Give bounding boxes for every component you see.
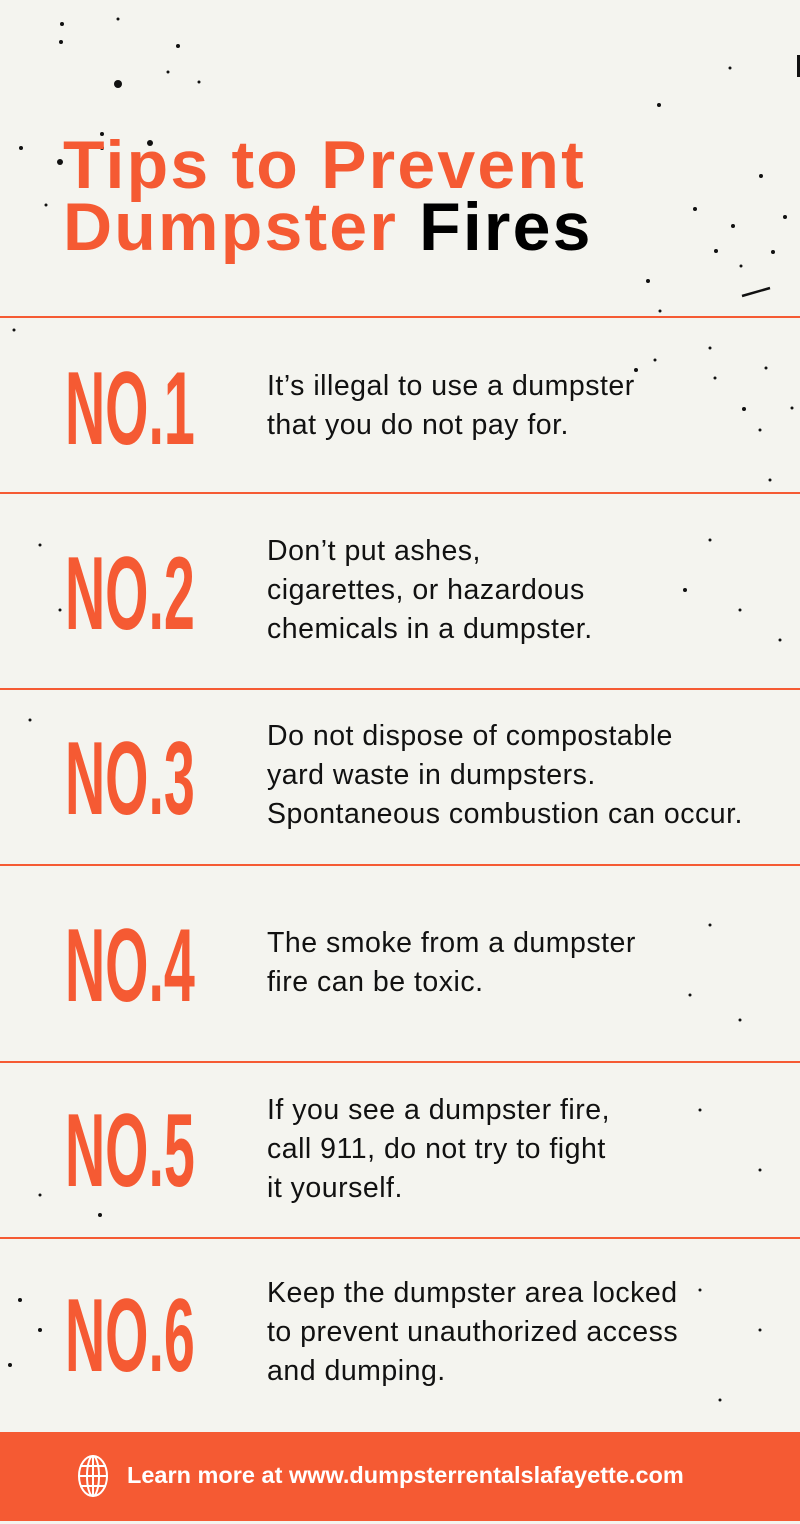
- text 4: [267, 927, 636, 998]
- number 4: NO.4: [65, 908, 195, 1024]
- text 3: Do not dispose of compostable: [267, 720, 673, 752]
- text 3: [267, 720, 743, 830]
- text 6: [267, 1277, 678, 1387]
- tip 3: [65, 720, 743, 837]
- text 2: Don’t put ashes,: [267, 535, 481, 567]
- text 5: call 911, do not try to fight: [267, 1133, 606, 1165]
- text 6: to prevent unauthorized access: [267, 1316, 678, 1348]
- text 6: Keep the dumpster area locked: [267, 1277, 678, 1309]
- text 5: [267, 1094, 610, 1204]
- tip 1: [65, 351, 635, 467]
- text 2: cigarettes, or hazardous: [267, 574, 585, 606]
- text 5: If you see a dumpster fire,: [267, 1094, 610, 1126]
- text 4: The smoke from a dumpster: [267, 927, 636, 959]
- text 5: it yourself.: [267, 1172, 403, 1204]
- text 1: It’s illegal to use a dumpster: [267, 370, 635, 402]
- number 6: NO.6: [65, 1278, 195, 1394]
- number 5: NO.5: [65, 1093, 195, 1209]
- text 1: that you do not pay for.: [267, 409, 569, 441]
- text 1: [267, 370, 635, 441]
- number 3: NO.3: [65, 721, 195, 837]
- icon: globe: [78, 1455, 108, 1497]
- tip 2: [65, 535, 593, 652]
- title: Tips to Prevent: [63, 127, 586, 203]
- footer bar: [0, 1432, 800, 1521]
- text 3: yard waste in dumpsters.: [267, 759, 596, 791]
- number 1: NO.1: [65, 351, 195, 467]
- tip 5: [65, 1093, 610, 1209]
- title: Dumpster Fires: [63, 189, 593, 265]
- text 3: Spontaneous combustion can occur.: [267, 798, 743, 830]
- footer text: Learn more at www.dumpsterrentalslafayette.com: [127, 1462, 684, 1488]
- tip 4: [65, 908, 636, 1024]
- text 6: and dumping.: [267, 1355, 446, 1387]
- title: [63, 127, 593, 265]
- text 2: [267, 535, 593, 645]
- number 2: NO.2: [65, 536, 195, 652]
- text 4: fire can be toxic.: [267, 966, 484, 998]
- tip 6: [65, 1277, 678, 1394]
- text 2: chemicals in a dumpster.: [267, 613, 593, 645]
